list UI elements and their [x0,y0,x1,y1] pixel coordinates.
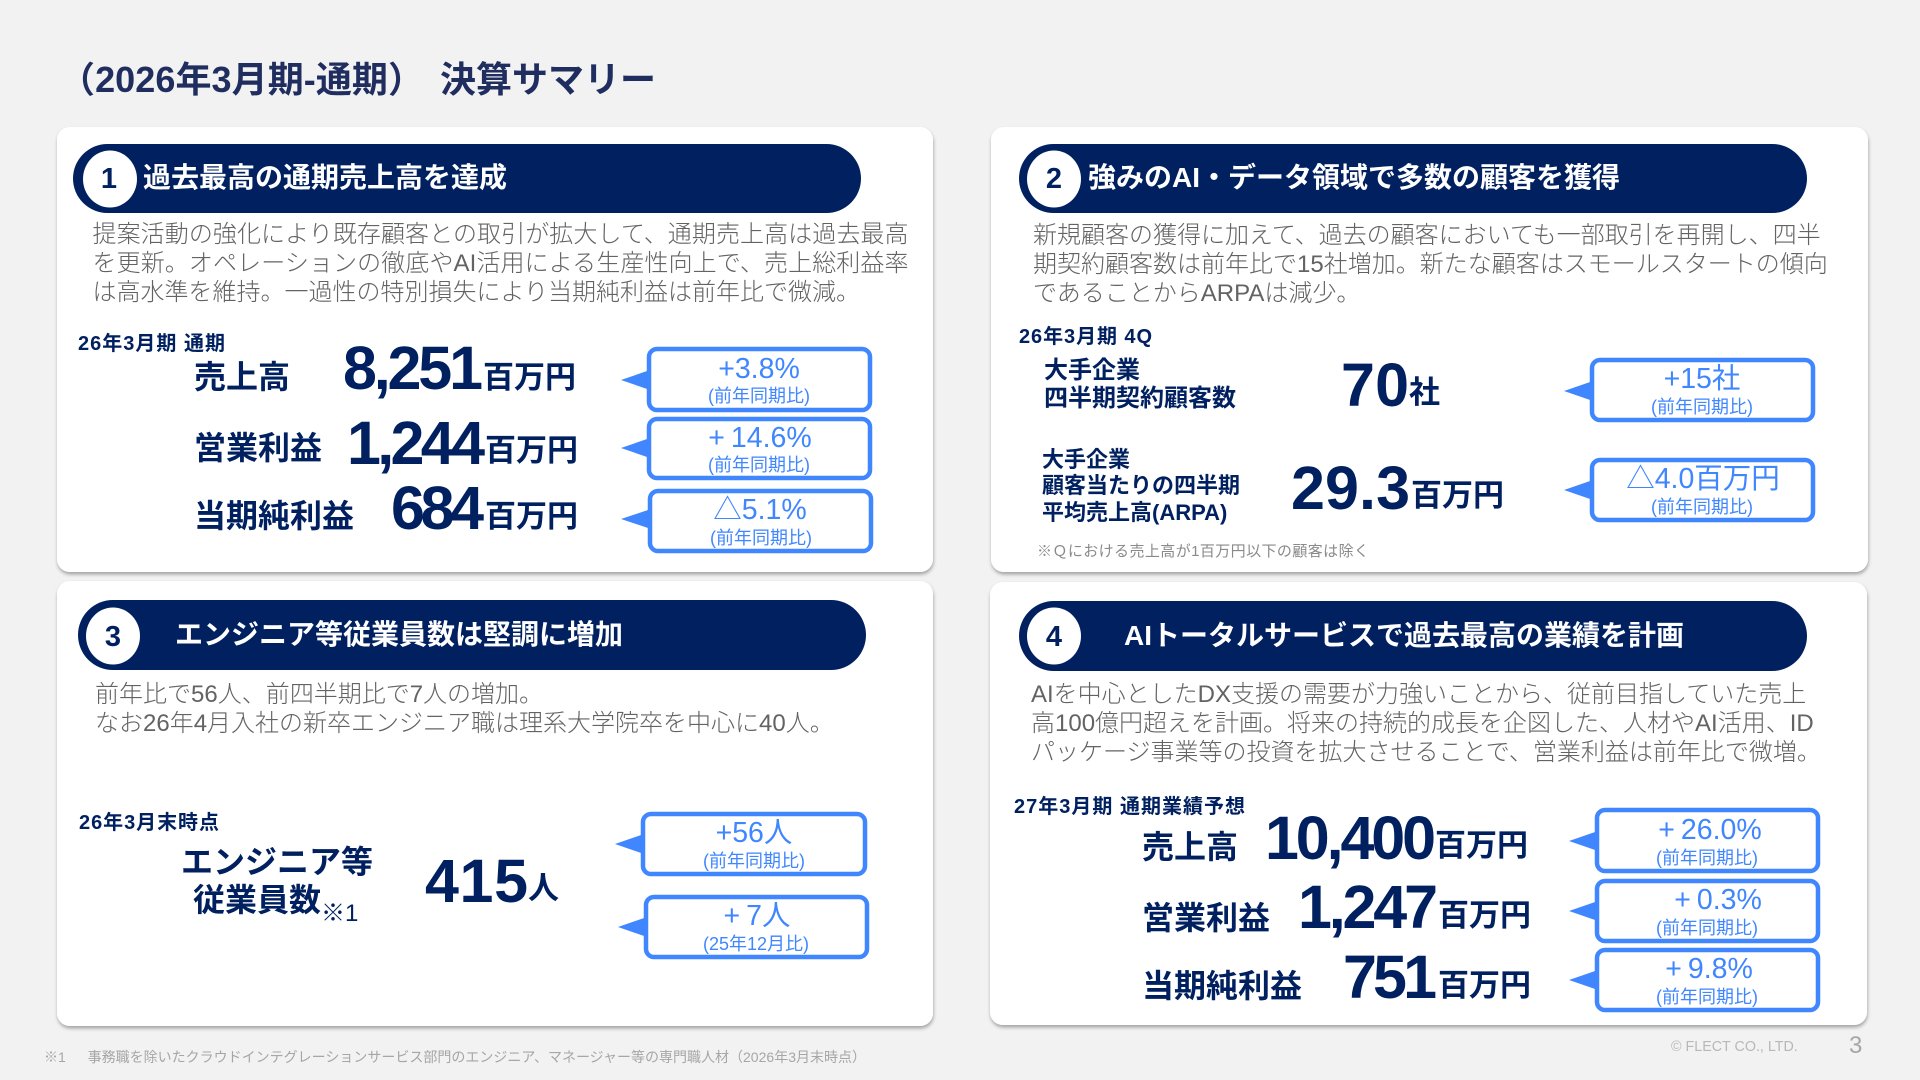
panel 3 body text [95,681,834,737]
panel: 3 engineers [57,581,933,1026]
forecast: net income: 751 [1343,943,1437,1011]
callout: forecast operating profit change [1569,881,1818,941]
forecast: net income: 百万円 [1438,968,1531,1003]
forecast: revenue [1142,804,1528,872]
metric: operating profit: 営業利益 [194,430,322,466]
callout: ARPA change: △4.0百万円 [1626,463,1780,495]
panel 2 note: ※Ｑにおける売上高が1百万円以下の顧客は除く [1037,543,1369,560]
forecast: operating profit: 百万円 [1438,898,1531,933]
panel 1 body text: 提案活動の強化により既存顧客との取引が拡大して、通期売上高は過去最高 [92,221,908,248]
title: （2026年3月期-通期） [59,59,424,100]
callout: forecast net income change: +9.8% [1665,953,1753,985]
callout: customer change: (前年同期比) [1651,397,1753,417]
callout: net income change [621,491,871,551]
metric: enterprise customers: 大手企業 [1044,357,1140,384]
panel 1 heading: 過去最高の通期売上高を達成 [143,162,507,193]
callout: operating profit change: +14.6% [708,422,812,454]
metric: engineers: 従業員数 [193,882,321,918]
panel 4 heading [1019,601,1807,671]
callout: forecast operating profit change: (前年同期比) [1656,918,1758,938]
panel 3 heading: エンジニア等従業員数は堅調に増加 [175,619,623,650]
panel 4 body text: AIを中心としたDX支援の需要が力強いことから、従前目指していた売上 [1031,681,1806,708]
metric: ARPA: 顧客当たりの四半期 [1042,473,1240,498]
panel 2 body text: であることからARPAは減少。 [1033,280,1360,307]
panel 2 heading [1019,144,1807,213]
callout: revenue change: (前年同期比) [708,386,810,406]
title: 決算サマリー [440,59,656,100]
panel 4 body text: パッケージ事業等の投資を拡大させることで、営業利益は前年比で微増。 [1031,739,1821,766]
panel 1 body text: は高水準を維持。一過性の特別損失により当期純利益は前年比で微減。 [92,279,860,306]
callout: year-on-year engineers: (前年同期比) [703,851,805,871]
forecast: revenue: 売上高 [1142,829,1238,865]
metric: ARPA: 29.3 [1291,454,1410,522]
metric: engineers: 415 [425,847,528,915]
callout: ARPA change: (前年同期比) [1651,497,1753,517]
forecast: revenue: 百万円 [1435,828,1528,863]
metric: enterprise customers [1044,351,1440,419]
panel 1 period label: 26年3月期 通期 [78,332,225,355]
metric: enterprise customers: 四半期契約顧客数 [1044,385,1236,412]
forecast: operating profit [1142,873,1531,941]
callout: customer change [1564,360,1813,420]
callout: net income change: (前年同期比) [710,528,812,548]
callout: forecast operating profit change: +0.3% [1674,884,1762,916]
panel 4 body text: 高100億円超えを計画。将来の持続的成長を企図した、人材やAI活用、ID [1031,710,1814,737]
panel 2 body text: 新規顧客の獲得に加えて、過去の顧客においても一部取引を再開し、四半 [1033,222,1821,249]
callout: year-on-year engineers: +56人 [716,817,792,849]
metric: net income: 684 [391,474,484,542]
metric: operating profit: 百万円 [485,433,578,468]
metric: revenue: 8,251 [343,334,483,402]
callout: operating profit change: (前年同期比) [708,455,810,475]
metric: operating profit: 1,244 [347,409,485,477]
panel 2 card [991,127,1868,572]
panel 2 body text [1033,222,1828,307]
metric: operating profit [194,409,578,477]
callout: forecast revenue change: (前年同期比) [1656,848,1758,868]
callout: forecast revenue change [1569,810,1818,871]
panel 1 body text [92,221,908,306]
callout: operating profit change [621,419,870,478]
callout: revenue change [621,349,870,410]
panel 2 body text: 期契約顧客数は前年比で15社増加。新たな顧客はスモールスタートの傾向 [1033,251,1828,278]
callout: net income change: △5.1% [713,494,807,526]
panel 3 period label: 26年3月末時点 [79,811,219,834]
metric: net income: 当期純利益 [194,498,354,534]
metric: engineers: エンジニア等 [181,844,373,880]
metric: ARPA: 百万円 [1411,478,1504,513]
callout: year-on-year engineers [615,814,865,874]
forecast: operating profit: 1,247 [1298,873,1438,941]
callout: quarter-on-quarter engineers: (25年12月比) [703,934,809,954]
forecast: revenue: 10,400 [1265,804,1436,872]
panel 4 card [990,582,1867,1025]
callout: forecast net income change [1569,950,1818,1010]
metric: engineers: ※1 [321,900,358,927]
callout: forecast revenue change: +26.0% [1658,814,1762,846]
metric: revenue [194,334,576,402]
callout: revenue change: +3.8% [718,353,800,385]
forecast: net income: 当期純利益 [1142,968,1302,1004]
metric: enterprise customers: 社 [1409,375,1440,410]
callout: quarter-on-quarter engineers [618,897,867,957]
panel 1 body text: を更新。オペレーションの徹底やAI活用による生産性向上で、売上総利益率 [92,250,908,277]
panel 3 heading [78,600,866,670]
metric: ARPA: 大手企業 [1042,447,1130,472]
panel 2 period label: 26年3月期 4Q [1019,325,1152,348]
panel 3 body text: なお26年4月入社の新卒エンジニア職は理系大学院卒を中心に40人。 [95,710,834,737]
metric: net income: 百万円 [485,499,578,534]
panel 3 body text: 前年比で56人、前四半期比で7人の増加。 [95,681,543,708]
panel 2 heading: 強みのAI・データ領域で多数の顧客を獲得 [1088,161,1620,193]
panel 1 heading: 1 [101,163,117,195]
panel 1 card [57,127,933,572]
forecast: operating profit: 営業利益 [1142,900,1270,936]
metric: revenue: 百万円 [483,360,576,395]
metric: ARPA [1042,447,1504,525]
callout: quarter-on-quarter engineers: +7人 [723,900,791,932]
metric: revenue: 売上高 [194,359,290,395]
panel 4 period label: 27年3月期 通期業績予想 [1014,795,1245,818]
copyright: © FLECT CO., LTD. [1671,1039,1798,1055]
metric: net income [194,474,578,542]
panel 3 card [57,581,933,1026]
panel: 4 forecast [990,582,1867,1025]
panel 2 heading: 2 [1046,163,1062,195]
metric: engineers [181,844,559,927]
footnote: ※1 事務職を除いたクラウドインテグレーションサービス部門のエンジニア、マネージャー等の専門職人材（2026年3月末時点） [44,1049,866,1065]
callout: customer change: +15社 [1664,363,1740,395]
metric: ARPA: 平均売上高(ARPA) [1042,500,1227,525]
panel: 1 full-year results [57,127,933,572]
forecast: net income [1142,943,1531,1011]
panel 4 heading: 4 [1046,621,1062,653]
metric: engineers: 人 [528,871,559,906]
panel: 2 customers [991,127,1868,572]
panel 3 heading: 3 [105,621,121,653]
panel 4 heading: AIトータルサービスで過去最高の業績を計画 [1124,620,1684,651]
title [59,59,656,100]
callout: ARPA change [1564,460,1813,520]
panel 1 heading [73,144,861,213]
callout: forecast net income change: (前年同期比) [1656,987,1758,1007]
metric: enterprise customers: 70 [1341,351,1409,419]
panel 4 body text [1031,681,1821,766]
page number: 3 [1849,1032,1862,1059]
